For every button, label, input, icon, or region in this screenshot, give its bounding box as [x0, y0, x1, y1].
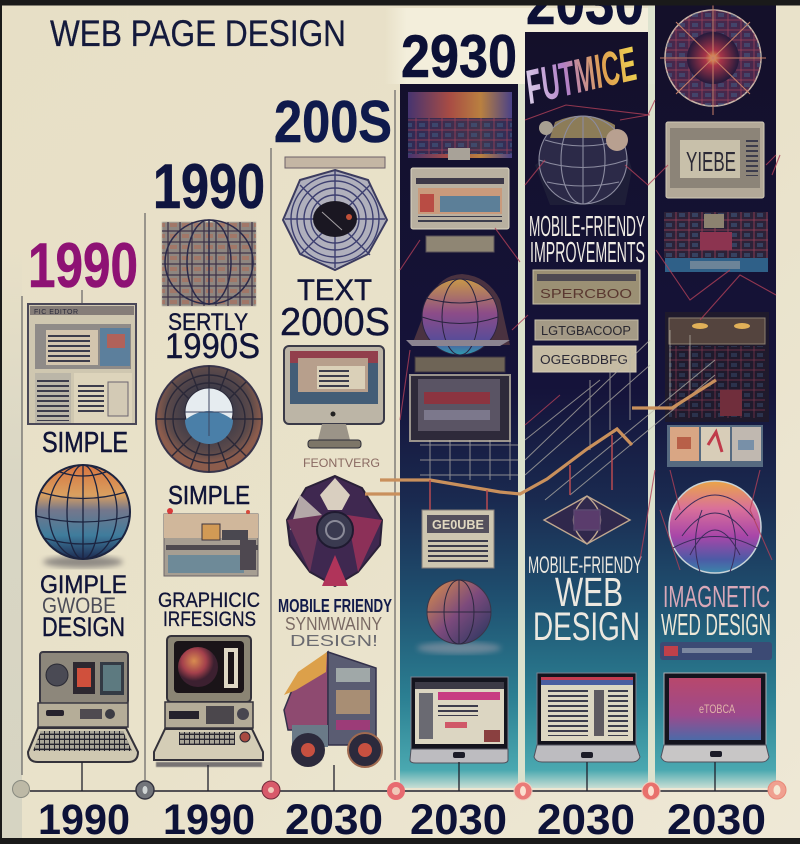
label: futmice: FUTMICE — [521, 38, 643, 115]
icon: globe with pedestal — [406, 274, 510, 355]
label: gimple globe design: GWOBE — [42, 593, 116, 618]
axis line — [30, 790, 770, 792]
icon: gradient globe — [669, 481, 761, 573]
bottom year labels: 2030 — [285, 796, 383, 844]
column 3 — [278, 157, 392, 767]
column 5 — [521, 38, 645, 762]
icon: globe — [36, 465, 130, 568]
label: gimple globe design: DESIGN — [42, 612, 125, 642]
icon: small data panel — [422, 510, 494, 568]
label: graphical designs: IRFESIGNS — [163, 608, 256, 631]
label: mobile friendly design: SYNMWAINY — [285, 614, 382, 634]
label: graphical designs — [158, 589, 260, 631]
label: mobile friendly design: DESIGN! — [290, 633, 378, 650]
icon: gem — [287, 476, 382, 586]
heading: 1990 magenta: 1990 — [28, 231, 138, 301]
column 1 — [28, 304, 138, 762]
icon: desktop monitor — [284, 346, 384, 448]
panel: column 5 background — [525, 32, 648, 788]
label: mobile-friendly web design — [528, 552, 642, 649]
icon: control bar — [660, 642, 772, 660]
icon: browser window — [411, 168, 509, 229]
icon: web globe — [156, 366, 262, 472]
icon: browser window: FIC EDITOR — [34, 309, 78, 316]
bottom year labels: 1990 — [38, 796, 130, 844]
icon: button bars: LGTGBACOOP — [541, 323, 631, 338]
light band behind 2930 — [385, 8, 656, 84]
label: gimple globe design: GIMPLE — [40, 571, 127, 599]
icon: lower globe — [417, 580, 501, 654]
railing: staircase lines — [420, 330, 715, 500]
infographic: IMPROVEMENTS — [530, 237, 645, 269]
timeline — [12, 762, 786, 844]
icon: wheeled machine — [284, 652, 382, 767]
label: simple: SIMPLE — [42, 427, 128, 459]
timeline nodes — [12, 780, 786, 800]
label: gimple globe design — [40, 571, 127, 642]
icon: button bars: OGEGBDBFG — [540, 352, 628, 367]
icon: laptop monitor — [534, 673, 640, 762]
label: mobile-friendly improvements — [529, 211, 645, 269]
icon: radial globe — [660, 5, 766, 115]
bottom year labels: 2030 — [667, 796, 766, 844]
infographic: MOBILE-FRIENDY — [529, 211, 645, 243]
icon: machine panel — [664, 212, 768, 272]
label: early 1990s: SERTLY — [168, 309, 248, 336]
label: simple: SIMPLE — [168, 480, 250, 510]
icon: spider web — [283, 170, 387, 270]
bottom year labels: 2030 — [537, 796, 635, 844]
left margin shade — [2, 250, 22, 840]
icon: monitor gradient screen: eTOBCA — [699, 702, 735, 716]
icon: header strip — [285, 157, 385, 168]
column 6 — [660, 5, 772, 762]
icon: diamond — [544, 496, 630, 544]
bottom year labels: 1990 — [163, 796, 255, 844]
heading: 2930: 2930 — [401, 23, 517, 90]
label: early 1990s — [165, 309, 260, 366]
icon: button bars — [533, 270, 640, 372]
icon: machine scene — [164, 508, 258, 576]
column headings — [28, 0, 644, 301]
orange hangers — [430, 435, 612, 510]
label: mobile-friendly web design: MOBILE-FRIENDY — [528, 552, 642, 579]
panel: column 6 background — [655, 5, 776, 788]
icon: small data panel: GE0UBE — [432, 517, 484, 532]
column 2 — [154, 220, 263, 767]
label: imagnetic web design — [661, 579, 771, 642]
label: text 2000s: TEXT — [297, 274, 372, 307]
icon: laptop monitor — [410, 677, 508, 763]
label: mobile-friendly web design: WEB — [555, 569, 623, 615]
icon: grid globe panel — [162, 220, 256, 306]
label: graphical designs: GRAPHICIC — [158, 589, 260, 612]
label: frontverg: FEONTVERG — [303, 456, 380, 470]
icon: crt computer — [154, 636, 263, 767]
title: WEB PAGE DESIGN — [50, 13, 346, 54]
heading: 1990 navy: 1990 — [153, 152, 265, 222]
icon: status bar — [415, 357, 505, 372]
label: mobile friendly design: MOBILE FRIENDY — [278, 596, 392, 616]
panel: column 4 background — [400, 84, 518, 788]
icon: retro computer — [28, 652, 138, 762]
label: text 2000s: 2000S — [280, 301, 390, 344]
heading: 2005: 200S — [274, 89, 392, 155]
bottom year labels: 2030 — [410, 796, 507, 844]
icon: wire globe — [535, 116, 632, 205]
icon: button bars: SPERCBOO — [540, 286, 632, 301]
ticks — [82, 762, 715, 791]
label: mobile friendly design — [278, 596, 392, 650]
label: text 2000s — [280, 274, 390, 344]
icon: three pictures — [667, 425, 763, 467]
column divider lines — [22, 90, 395, 780]
icon: lower machine panel — [665, 312, 769, 422]
bottom year labels — [38, 796, 766, 844]
icon: monitor gradient screen — [661, 673, 769, 762]
connector: orange pipe — [365, 380, 716, 494]
label: early 1990s: 1990S — [165, 327, 260, 366]
connector network: red lines — [400, 100, 780, 570]
icon: second browser window — [410, 375, 510, 441]
icon: browser window — [28, 304, 136, 424]
icon: colorful top panel — [408, 92, 512, 160]
icon: yiebe window — [666, 122, 764, 198]
icon: yiebe window: YIEBE — [686, 146, 736, 177]
label: mobile-friendly web design: DESIGN — [533, 605, 640, 649]
column 4 — [406, 92, 512, 763]
gaps between dark columns — [518, 6, 655, 788]
icon: small bar — [426, 236, 494, 252]
